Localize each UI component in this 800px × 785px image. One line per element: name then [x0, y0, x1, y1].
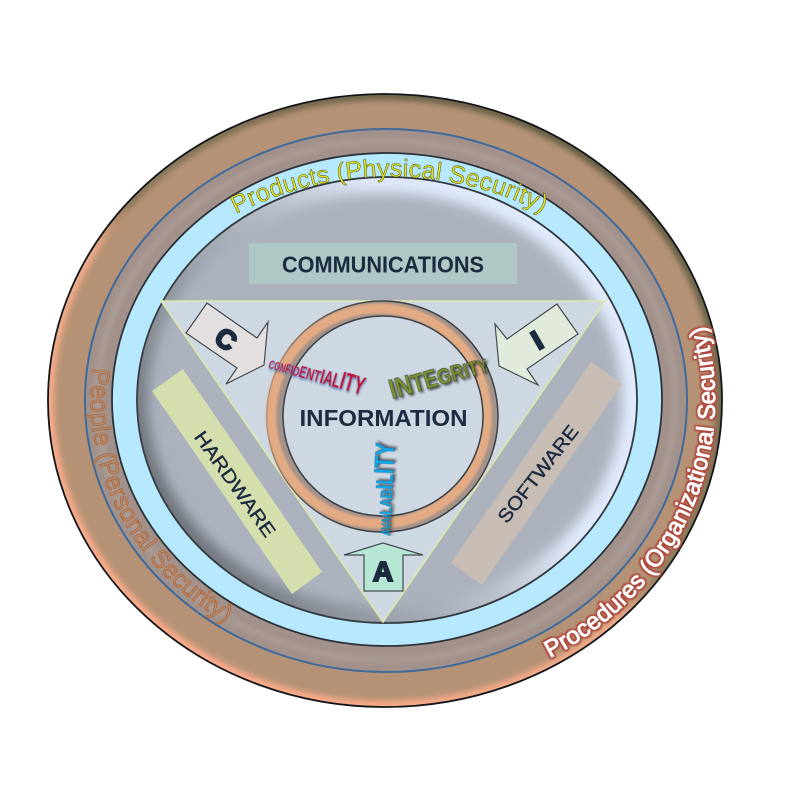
curved label: procedures: Procedures (Organizational Security) [541, 326, 718, 660]
light blue ring: products layer [112, 153, 662, 646]
arrow A: availability: A [373, 556, 393, 587]
arrow C: confidentiality [186, 303, 268, 384]
arrow C: confidentiality: C [209, 322, 242, 357]
arrow I: integrity: I [526, 326, 548, 355]
central triangle [161, 301, 605, 622]
middle ring: people layer [85, 129, 687, 672]
outer ring: procedures layer [48, 94, 722, 707]
information ring [267, 301, 498, 532]
communications box [249, 243, 517, 284]
software bar [451, 362, 622, 585]
arrow A: availability [344, 543, 423, 591]
word: integrity: INTEGRITY [385, 347, 491, 405]
curved label: products: Products (Physical Security) [230, 158, 546, 215]
inner plate [137, 177, 637, 623]
information label: INFORMATION [300, 405, 468, 431]
curved label: people: People (Personal Security) [86, 370, 232, 625]
arrow I: integrity [495, 304, 578, 385]
hardware bar [152, 369, 322, 594]
communications box: COMMUNICATIONS [282, 252, 484, 278]
software bar: SOFTWARE [494, 422, 583, 528]
word: availability: AVAILABILITY [365, 442, 401, 536]
word: confidentiality: CONFIDENTIALITY [266, 347, 368, 401]
hardware bar: HARDWARE [189, 428, 279, 542]
